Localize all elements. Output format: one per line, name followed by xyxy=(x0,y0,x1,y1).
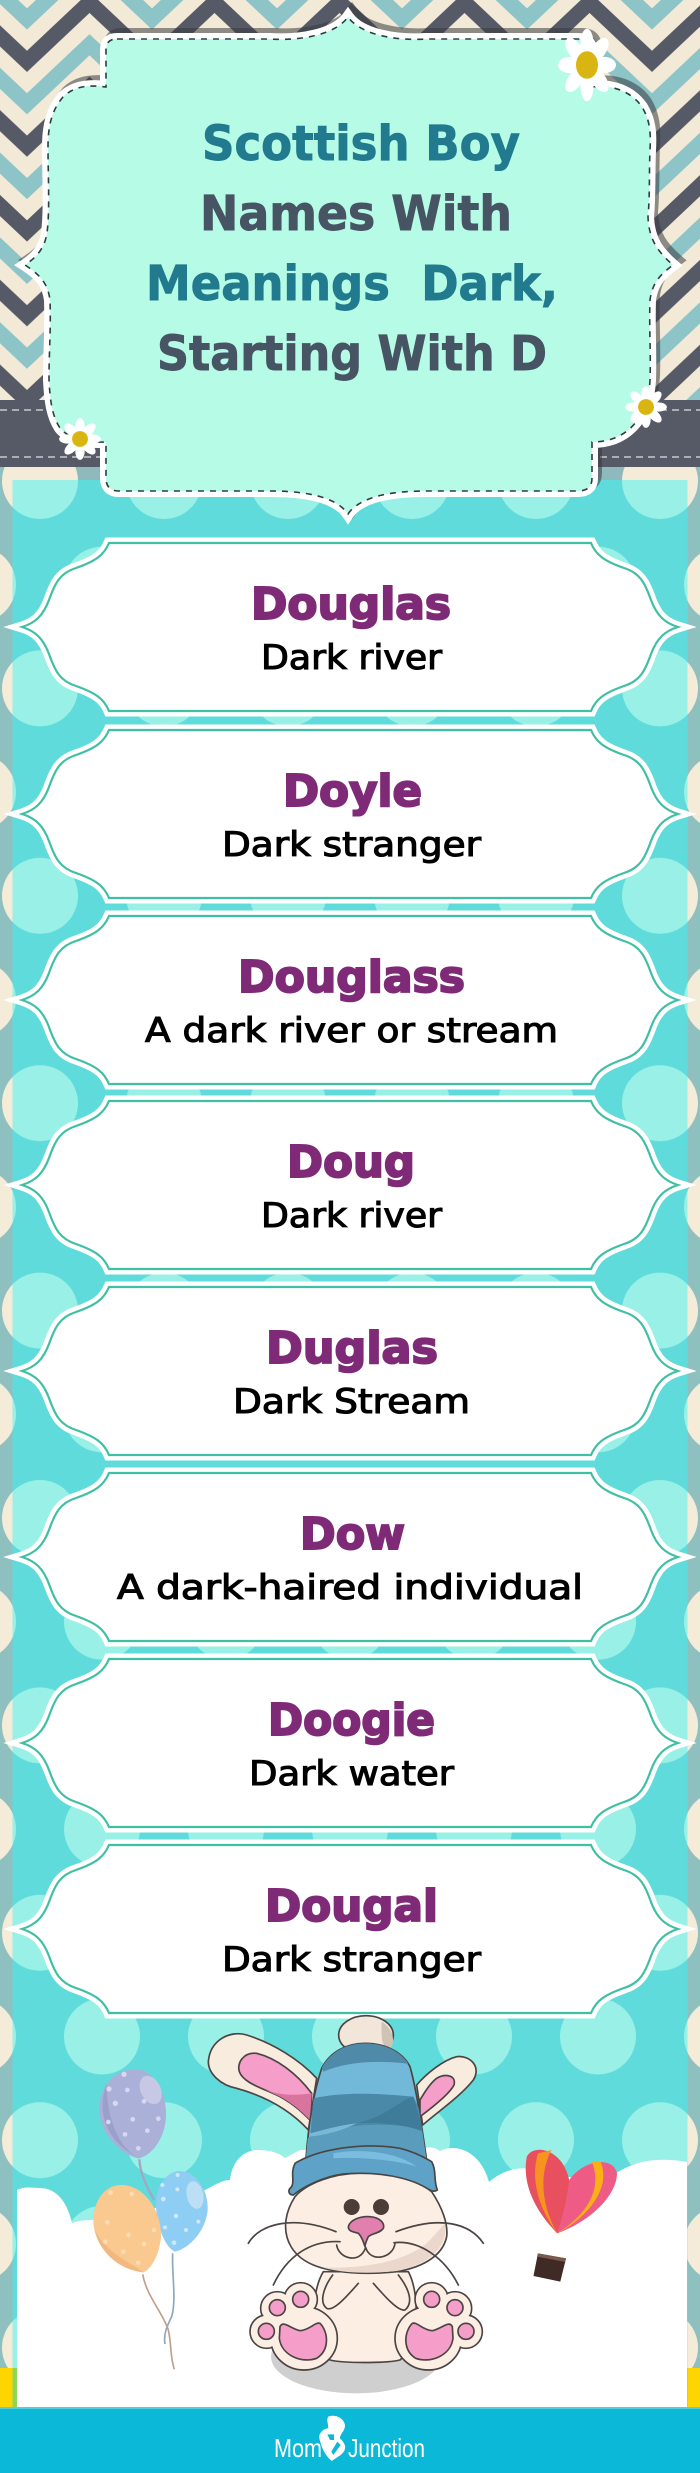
icon: heart hot air balloon xyxy=(526,2150,617,2233)
title: Names With xyxy=(200,186,512,242)
name card: Doyle: Doyle xyxy=(283,766,422,817)
name card: Doogie: Doogie xyxy=(268,1695,435,1746)
icon: daisy bottom right xyxy=(625,386,667,428)
name card: Douglass: A dark river or stream xyxy=(145,1011,558,1051)
dark stitched ribbon band xyxy=(0,400,700,467)
name card: Dow: Dow xyxy=(300,1509,405,1560)
name card: Doogie xyxy=(22,1659,678,1827)
name card: Doyle: Dark stranger xyxy=(222,825,481,865)
logo: MomJunction xyxy=(274,2416,425,2463)
icon: daisy top right xyxy=(558,29,616,101)
name card: Douglas: Douglas xyxy=(251,579,451,630)
name card: Duglas: Duglas xyxy=(266,1323,438,1374)
name card: Dougal: Dougal xyxy=(265,1881,438,1932)
name card: Doug: Dark river xyxy=(261,1196,442,1236)
chevron header background xyxy=(0,0,700,402)
title xyxy=(146,116,558,382)
name card: Doogie: Dark water xyxy=(249,1754,454,1794)
icon: balloon basket xyxy=(533,2253,566,2282)
icon: daisy bottom left xyxy=(59,418,101,460)
name card: Dow xyxy=(22,1473,678,1641)
white cloud xyxy=(17,2147,687,2408)
name card: Douglass: Douglass xyxy=(238,952,465,1003)
right foot xyxy=(395,2283,482,2370)
logo: MomJunction: Junction xyxy=(348,2433,425,2463)
name card: Doyle xyxy=(22,730,678,898)
illustration: bunny scene xyxy=(17,2016,687,2408)
name card: Doug xyxy=(22,1101,678,1269)
name card: Duglas xyxy=(22,1287,678,1455)
icon: bunny xyxy=(208,2016,483,2393)
name card: Dow: A dark-haired individual xyxy=(117,1568,583,1608)
title: Scottish Boy xyxy=(202,116,520,172)
panel: title plaque xyxy=(25,12,677,514)
name card: Douglas: Dark river xyxy=(261,638,442,678)
icon: balloons xyxy=(93,2069,208,2369)
name card: Douglass xyxy=(22,916,678,1084)
left foot xyxy=(250,2283,337,2370)
icon: mother and child xyxy=(319,2416,345,2461)
name card: Dougal: Dark stranger xyxy=(222,1940,481,1980)
name card: Duglas: Dark Stream xyxy=(233,1382,470,1422)
title: Meanings Dark, xyxy=(146,256,558,312)
name card: Doug: Doug xyxy=(287,1137,415,1188)
teal polka dot background xyxy=(0,467,700,2408)
footer bar xyxy=(0,2407,700,2473)
name card: Douglas xyxy=(22,543,678,711)
logo: MomJunction: Mom xyxy=(274,2433,322,2463)
name card: Dougal xyxy=(22,1845,678,2013)
title: Starting With D xyxy=(157,326,547,382)
